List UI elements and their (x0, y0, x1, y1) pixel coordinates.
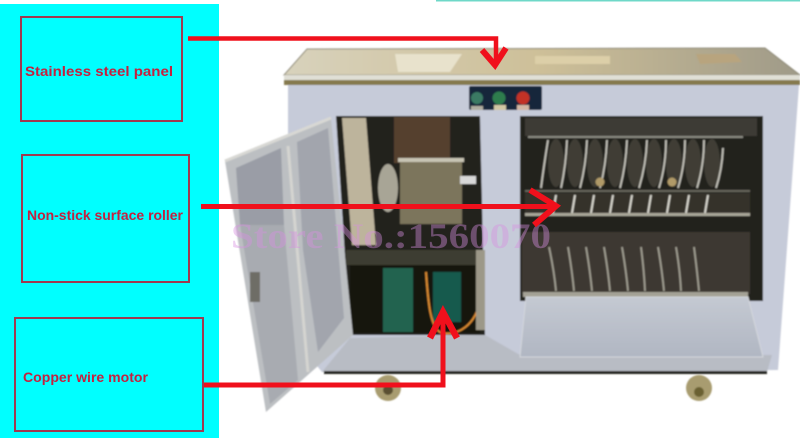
label box: stainless steel panel: Stainless steel panel (25, 63, 173, 79)
label box: non-stick surface roller: Non-stick surface roller (27, 207, 184, 223)
lower roller wires (549, 247, 699, 291)
upper roller wires (541, 140, 723, 188)
wheel: right (686, 375, 712, 401)
watermark: Store No.:1560070 (231, 216, 551, 256)
arrow: to stainless steel panel (188, 38, 506, 65)
machine illustration (225, 48, 800, 412)
upper roller barrels (548, 139, 720, 187)
label box: copper wire motor: Copper wire motor (23, 369, 149, 385)
control panel (469, 86, 542, 110)
base strip (324, 371, 767, 374)
roller compartment (520, 116, 763, 301)
machine body (288, 85, 799, 372)
label box: copper wire motor (15, 318, 203, 431)
stainless top surface (284, 48, 800, 85)
open door (225, 118, 353, 412)
arrow: to roller (201, 190, 556, 225)
arrow: to motor (204, 312, 457, 385)
label box: non-stick surface roller (22, 155, 189, 282)
wheel: left (375, 375, 401, 401)
fold-down tray (520, 297, 763, 357)
door opening: drive and motor (336, 116, 485, 335)
top teal edge line (436, 0, 800, 2)
middle roller wires (553, 195, 708, 213)
panel: cyan label column (0, 4, 219, 438)
label box: stainless steel panel (21, 17, 182, 121)
